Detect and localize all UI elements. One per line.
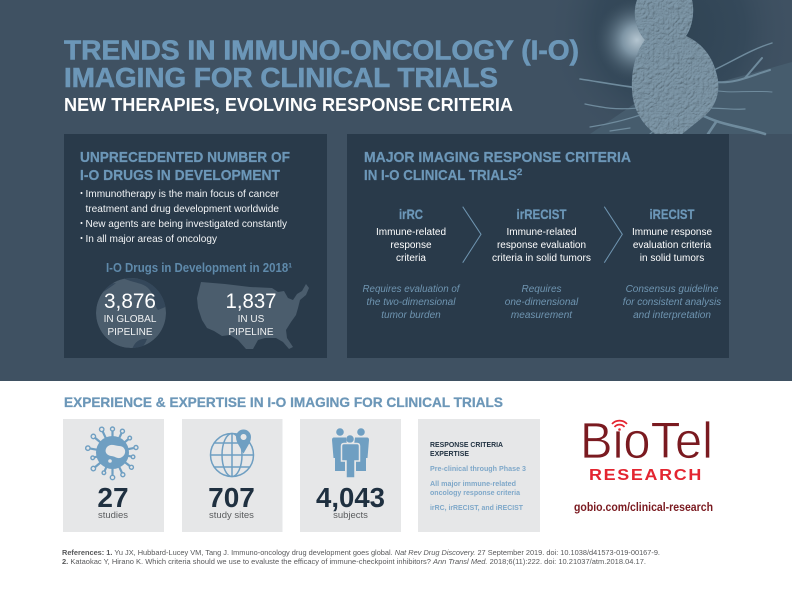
icon: globe with pin — [210, 431, 254, 476]
panel heading: IN I-O CLINICAL TRIALS — [364, 167, 517, 184]
expertise list — [430, 464, 526, 512]
bullet list: Immunotherapy is the main focus of cancer — [86, 189, 280, 200]
label: subjects — [333, 510, 368, 521]
stat: global pipeline: 3,876 — [104, 289, 156, 313]
expertise list: oncology response criteria — [430, 488, 521, 497]
column: irRC: Immune-related — [376, 227, 446, 238]
stat: 27 — [97, 482, 129, 513]
column: irRECIST: one-dimensional — [505, 297, 579, 308]
title: TRENDS IN IMMUNO-ONCOLOGY (I-O) — [64, 34, 579, 66]
column: iRECIST: Immune response — [632, 227, 712, 238]
icon: wifi signal — [612, 421, 627, 431]
card: study sites — [182, 419, 282, 532]
column: irRC: irRC — [399, 206, 423, 222]
stat: US pipeline: PIPELINE — [228, 327, 274, 338]
column: irRECIST: criteria in solid tumors — [492, 253, 591, 264]
card: subjects — [300, 419, 401, 532]
references: 2. Kataokac Y, Hirano K. Which criteria should we use to evaluste the efficacy of immune-checkpoint inhibitors? Ann Transl Med. 2018;6(11):222. doi: 10.21037/atm.2018.04.17. — [62, 557, 646, 566]
column: irRECIST: response evaluation — [497, 240, 586, 251]
section heading: experience and expertise: EXPERIENCE & EXPERTISE IN I-O IMAGING FOR CLINICAL TRIALS — [64, 395, 503, 410]
references: References: 1. Yu JX, Hubbard-Lucey VM, Tang J. Immuno-oncology drug development goes global. Nat Rev Drug Discovery. 27 September 2019. doi: 10.1038/d41573-019-00167-9. — [62, 548, 660, 557]
icon: US map — [197, 282, 309, 349]
expertise list: irRC, irRECIST, and iRECIST — [430, 503, 523, 512]
panel: major imaging response criteria — [347, 134, 729, 358]
column: irRC — [362, 206, 461, 321]
column: iRECIST: and interpretation — [633, 310, 711, 321]
column: irRECIST: irRECIST — [516, 206, 567, 222]
dark header background — [0, 0, 792, 381]
icon: people — [332, 428, 369, 478]
card: studies — [63, 419, 164, 532]
card: response criteria expertise — [418, 419, 540, 532]
column: irRECIST: measurement — [511, 310, 573, 321]
label: studies — [98, 510, 128, 521]
chart heading: I-O Drugs in Development in 2018¹ — [106, 261, 292, 275]
card heading: EXPERTISE — [430, 449, 469, 458]
column: iRECIST: in solid tumors — [640, 253, 704, 264]
title: IMAGING FOR CLINICAL TRIALS — [64, 62, 498, 93]
stat: global pipeline — [104, 289, 157, 338]
panel: unprecedented number of I-O drugs — [64, 134, 327, 358]
expertise list: Pre-clinical through Phase 3 — [430, 464, 526, 473]
column: irRECIST: Immune-related — [506, 227, 577, 238]
subtitle: NEW THERAPIES, EVOLVING RESPONSE CRITERIA — [64, 95, 513, 115]
card heading: RESPONSE CRITERIA — [430, 440, 503, 449]
arrow: chevron 1 — [463, 207, 481, 263]
expertise list: All major immune-related — [430, 479, 516, 488]
title — [64, 34, 579, 115]
icon: globe — [96, 277, 168, 351]
stat: US pipeline — [226, 289, 276, 338]
column: iRECIST: for consistent analysis — [623, 297, 721, 308]
panel heading: UNPRECEDENTED NUMBER OF — [80, 149, 290, 166]
stat: US pipeline: IN US — [238, 314, 265, 325]
panel heading — [80, 149, 290, 184]
image: cancer cell micrograph — [545, 0, 792, 134]
stat: 4,043 — [316, 482, 385, 513]
card heading — [430, 440, 503, 458]
bullet list: New agents are being investigated constantly — [86, 219, 288, 230]
column: irRECIST: Requires — [521, 284, 562, 295]
stat: global pipeline: PIPELINE — [107, 327, 153, 338]
logo: BioTel Research: RESEARCH — [589, 467, 703, 484]
column: irRC: Requires evaluation of — [362, 284, 461, 295]
arrow: chevron 2 — [604, 207, 622, 263]
icon: virus — [85, 426, 138, 480]
panel heading — [364, 149, 631, 184]
column: iRECIST: evaluation criteria — [633, 240, 712, 251]
bullet list — [80, 189, 288, 245]
website link: gobio.com/clinical-research — [574, 502, 713, 514]
panel heading: MAJOR IMAGING RESPONSE CRITERIA — [364, 149, 631, 166]
panel heading: I-O DRUGS IN DEVELOPMENT — [80, 167, 280, 184]
panel heading: 2 — [517, 167, 522, 178]
label: study sites — [209, 510, 254, 521]
logo: BioTel Research: BioTel — [580, 412, 713, 469]
column: iRECIST: Consensus guideline — [626, 284, 719, 295]
column: irRC: the two-dimensional — [367, 297, 456, 308]
stat: global pipeline: IN GLOBAL — [104, 314, 157, 325]
references — [62, 548, 660, 566]
column: irRECIST — [492, 206, 591, 321]
column: iRECIST — [623, 206, 721, 321]
bullet list: In all major areas of oncology — [86, 234, 218, 245]
column: iRECIST: iRECIST — [650, 206, 695, 222]
stat: 707 — [208, 482, 255, 513]
column: irRC: response — [390, 240, 432, 251]
column: irRC: criteria — [396, 253, 426, 264]
bullet list: treatment and drug development worldwide — [86, 204, 279, 215]
column: irRC: tumor burden — [381, 310, 441, 321]
stat: US pipeline: 1,837 — [226, 289, 276, 313]
